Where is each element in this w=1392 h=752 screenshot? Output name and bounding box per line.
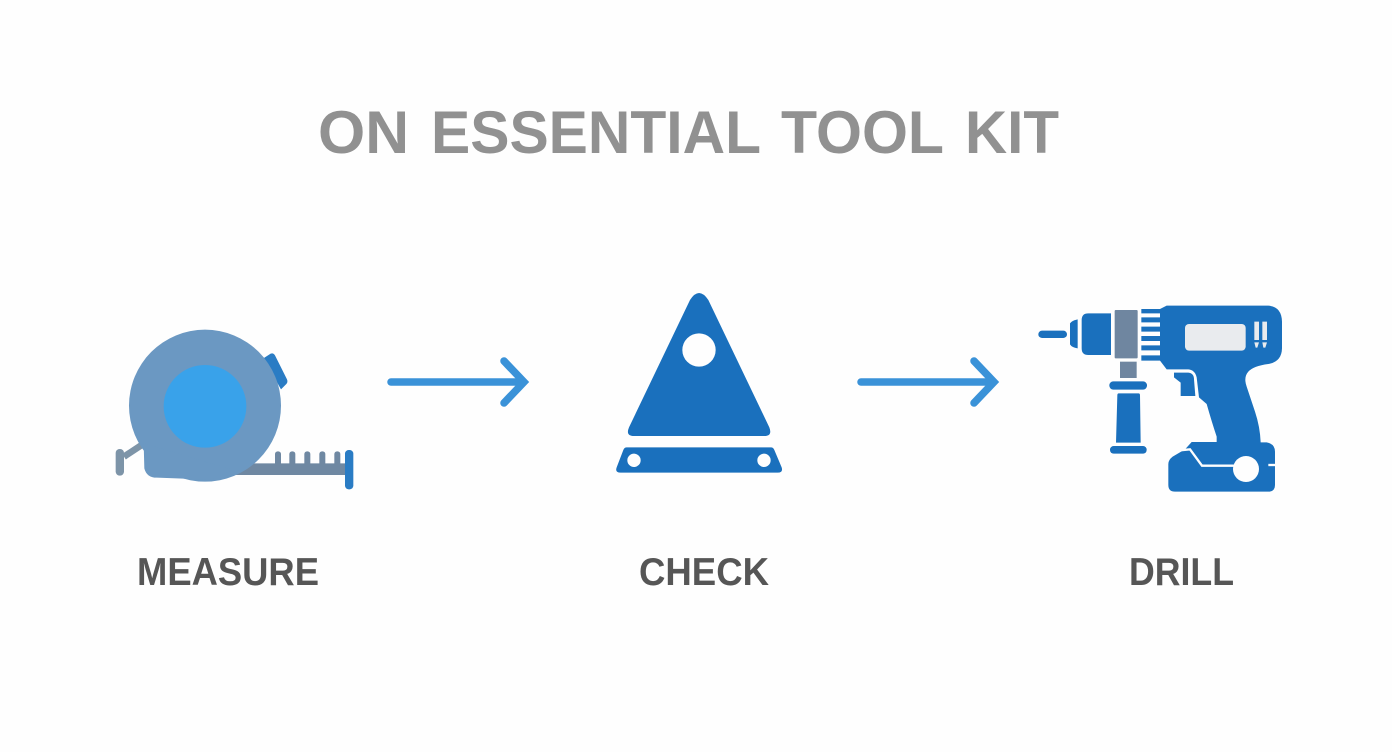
label: drill: DRILL — [1129, 551, 1234, 594]
title — [318, 99, 1059, 166]
arrow: measure to check — [391, 361, 524, 403]
label: check: CHECK — [639, 551, 769, 594]
title: ESSENTIAL — [431, 99, 761, 166]
icon: cordless drill — [1038, 306, 1282, 492]
title: ON — [318, 99, 409, 166]
label: measure: MEASURE — [137, 551, 319, 594]
arrow: check to drill — [861, 361, 994, 403]
icon: triangle square — [616, 293, 782, 473]
icon: tape measure — [116, 330, 353, 489]
title: TOOL — [781, 99, 944, 166]
title: KIT — [965, 99, 1059, 166]
